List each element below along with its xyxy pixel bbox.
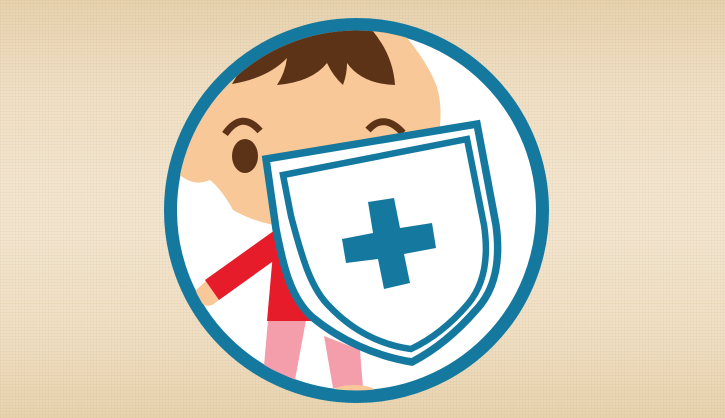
- icon: medical cross: [342, 198, 436, 289]
- icon: left eyebrow: [225, 121, 260, 134]
- icon: left leg: [264, 320, 306, 380]
- icon: right eyebrow: [368, 122, 403, 133]
- shield: [266, 124, 498, 362]
- child character: [180, 30, 441, 390]
- icon: left eye: [232, 139, 258, 173]
- icon: head: [180, 30, 441, 225]
- icon: right leg: [324, 336, 363, 388]
- icon: arm: [205, 232, 274, 300]
- icon: hand: [196, 281, 220, 306]
- shield outer outline: [266, 124, 498, 362]
- icon: foot: [334, 385, 374, 390]
- icon: shirt: [267, 260, 311, 321]
- shield inner outline: [283, 139, 486, 349]
- badge circle: [170, 24, 542, 396]
- icon: hair: [232, 30, 395, 85]
